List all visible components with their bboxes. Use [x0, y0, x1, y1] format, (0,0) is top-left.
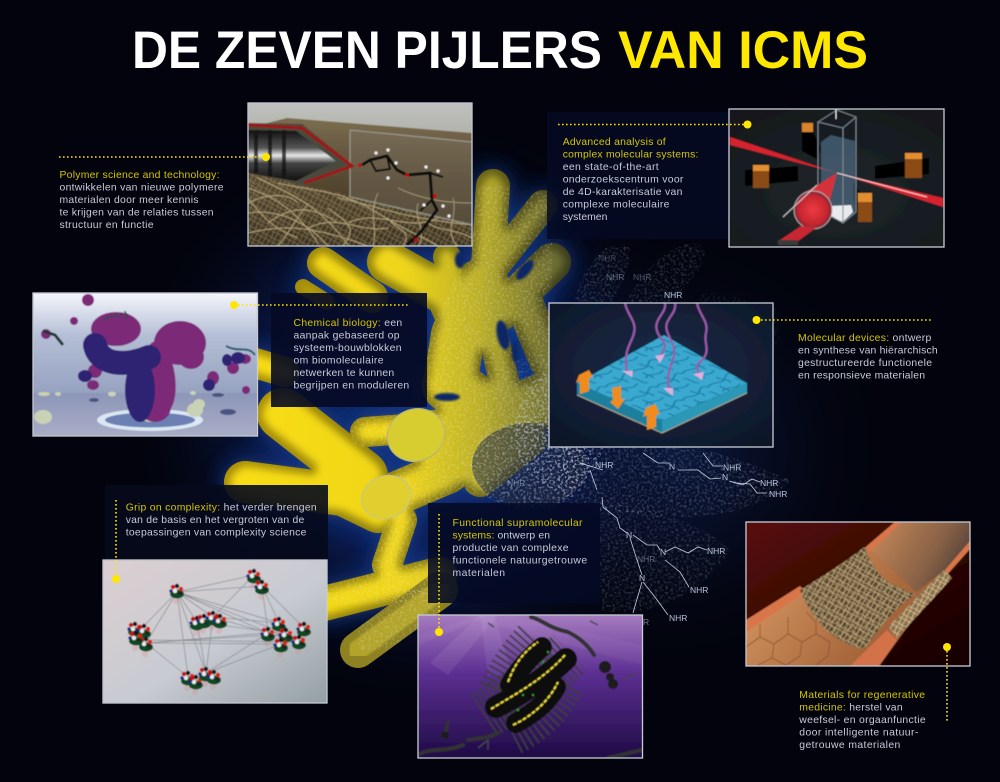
frame: [549, 303, 773, 447]
panel: advanced analysis: [547, 109, 944, 247]
text: regenerative medicine: Materials for regenerative: [799, 690, 925, 701]
connector: functional systems: [435, 514, 443, 636]
text: molecular devices: [798, 333, 938, 382]
panel: functional supramolecular systems: [418, 503, 642, 758]
text: polymer: materialen door meer kennis: [60, 195, 198, 206]
text: chemical biology: systeem-bouwblokken: [294, 343, 402, 354]
text: regenerative medicine: weefsel- en orgaanfunctie: [798, 715, 926, 726]
molecular chains with NHR labels: NHR: [507, 478, 525, 488]
text: advanced analysis: complex molecular systems:: [563, 150, 698, 160]
molecular chains with NHR labels: NHR: [760, 478, 778, 488]
panel: polymer science: [59, 103, 472, 246]
text: molecular devices: en responsieve materialen: [798, 370, 925, 382]
connector: regenerative medicine: [943, 643, 951, 722]
title: DE ZEVEN PIJLERS: [132, 21, 602, 80]
image: drill tip and polymer fibres: [248, 104, 472, 246]
text: molecular devices: Molecular devices: ontwerp: [798, 333, 932, 344]
text: chemical biology: Chemical biology: een: [294, 318, 402, 329]
molecular chains with NHR labels: N: [669, 462, 675, 472]
text: advanced analysis: [563, 137, 698, 223]
molecular chains with NHR labels: NHR: [769, 489, 787, 499]
text: functional systems: [452, 518, 587, 579]
connector: grip on complexity: [112, 500, 120, 583]
frame: [729, 109, 944, 247]
text: grip on complexity: van de basis en het vergroten van de: [126, 515, 305, 526]
title: VAN ICMS: [618, 21, 868, 80]
text: grip on complexity: toepassingen van complexity science: [126, 528, 307, 538]
connector: advanced analysis: [558, 120, 752, 128]
text: polymer: Polymer science and technology:: [60, 170, 220, 181]
text: advanced analysis: onderzoekscentrum voor: [563, 174, 684, 186]
molecular chains with NHR labels: NHR: [723, 462, 741, 472]
text: chemical biology: om biomoleculaire: [294, 356, 384, 366]
frame: [746, 522, 970, 666]
text: advanced analysis: de 4D-karakterisatie van: [563, 187, 683, 198]
text: functional systems: systems: ontwerp en: [452, 530, 550, 542]
text: polymer: [60, 170, 224, 231]
panel: chemical biology: [33, 293, 427, 436]
molecular chains with NHR labels: R: [643, 617, 649, 627]
molecular chains with NHR labels: NHR: [690, 585, 708, 595]
text: molecular devices: en synthese van hiërarchisch: [798, 346, 938, 356]
connector: polymer: [59, 153, 270, 161]
text box: chemical biology: [271, 293, 427, 407]
molecular chains with NHR labels: NHR: [664, 290, 682, 300]
panel: grip on complexity: [103, 485, 328, 703]
connector: chemical biology: [230, 301, 410, 309]
molecular chains with NHR labels: NHR: [637, 554, 655, 564]
molecular chains with NHR labels: N: [626, 530, 632, 540]
central coral structure: [245, 186, 552, 650]
image: patterned blue surface: [550, 304, 772, 446]
image: supramolecular fibre: [418, 616, 642, 758]
text: functional systems: Functional supramolecular: [452, 518, 583, 529]
molecular chains with NHR labels: N: [660, 547, 666, 557]
text: regenerative medicine: getrouwe materialen: [799, 740, 901, 751]
molecular chains with NHR labels: NHR: [669, 613, 687, 623]
text: polymer: ontwikkelen van nieuwe polymere: [60, 182, 224, 194]
title: [132, 21, 868, 80]
molecular chains with NHR labels: NHR: [606, 272, 624, 282]
text: chemical biology: aanpak gebaseerd op: [294, 330, 400, 342]
molecular chains with NHR labels: N: [639, 573, 645, 583]
wireframe mesh fading out: [470, 243, 790, 612]
text: functional systems: productie van complexe: [452, 543, 569, 554]
text: functional systems: functionele natuurgetrouwe: [452, 556, 587, 566]
text: regenerative medicine: medicine: herstel van: [799, 702, 903, 714]
text: advanced analysis: systemen: [563, 212, 608, 223]
frame: [248, 103, 472, 246]
text box: functional systems: [428, 503, 600, 603]
text: functional systems: materialen: [452, 568, 505, 579]
text: chemical biology: netwerken te kunnen: [294, 368, 394, 379]
frame: [418, 615, 642, 758]
text: polymer: te krijgen van de relaties tussen: [60, 208, 214, 218]
connector: molecular devices: [752, 316, 931, 324]
frame: [33, 293, 258, 436]
molecular chains with NHR labels: N: [722, 472, 728, 482]
text: grip on complexity: Grip on complexity: het verder brengen: [126, 502, 317, 514]
text: molecular devices: gestructureerde functionele: [798, 358, 932, 369]
image: tube with fibre mesh: [746, 522, 970, 666]
text box: advanced analysis: [547, 112, 729, 239]
panel: molecular devices: [549, 303, 938, 447]
text: advanced analysis: complexe moleculaire: [563, 200, 670, 210]
text: chemical biology: [294, 318, 409, 392]
molecular chains with NHR labels: NHR: [598, 253, 616, 263]
image: cuvette with laser beams: [730, 110, 944, 246]
text box: grip on complexity: [105, 485, 328, 560]
molecular chains with NHR labels: NHR: [595, 460, 613, 470]
image: network of molecules: [104, 560, 326, 702]
molecular chains with NHR labels: [507, 253, 787, 627]
text: advanced analysis: een state-of-the-art: [563, 162, 659, 173]
text: polymer: structuur en functie: [60, 220, 154, 231]
text: chemical biology: begrijpen en moduleren: [294, 380, 409, 392]
text: grip on complexity: [126, 502, 317, 538]
image: antibody: [34, 294, 257, 436]
panel: regenerative medicine: [746, 522, 970, 751]
text: regenerative medicine: [798, 690, 926, 751]
molecular chains with NHR labels: NHR: [707, 546, 725, 556]
text: advanced analysis: Advanced analysis of: [563, 137, 666, 148]
molecular chains with NHR labels: NHR: [633, 272, 651, 282]
text: regenerative medicine: door intelligente natuur-: [799, 728, 918, 738]
frame: [103, 560, 327, 703]
